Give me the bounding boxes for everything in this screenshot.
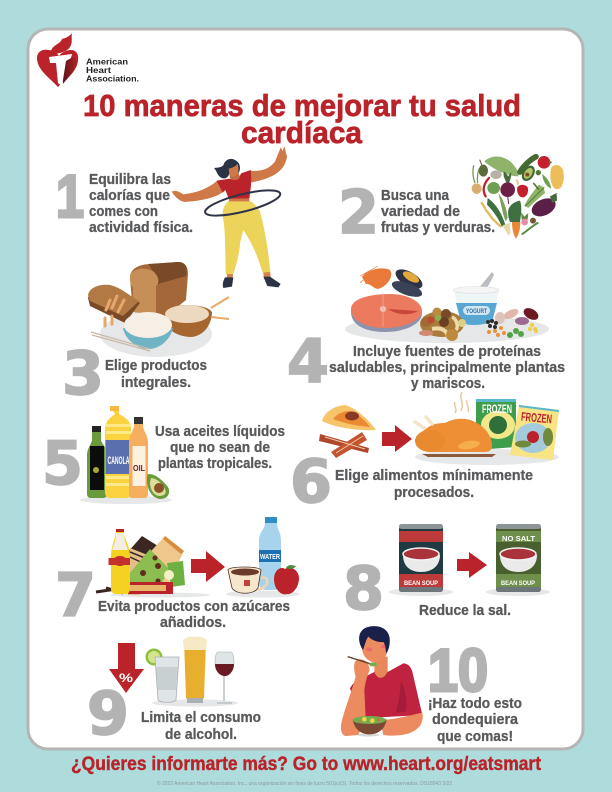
step 10 text: que comas!: [437, 728, 513, 745]
step 5 number: 5: [42, 429, 83, 499]
step 2 text: variedad de: [381, 203, 460, 220]
icon: roast turkey and frozen vegetables: FROZEN: [520, 410, 553, 426]
step 3 text: [105, 357, 207, 391]
step 10 text: [428, 695, 522, 745]
icon: woman with hula hoop: [172, 146, 287, 288]
icon: soup cans: BEAN SOUP: [404, 580, 439, 587]
step 5 text: plantas tropicales.: [158, 455, 272, 472]
step 10 text: ¡Haz todo esto: [428, 695, 522, 712]
step 4 text: y mariscos.: [411, 375, 485, 392]
icon: soup cans: BEAN SOUP: [501, 580, 536, 587]
step 7 number: 7: [55, 561, 96, 631]
step 10 text: dondequiera: [432, 711, 519, 728]
icon: sugary snacks: [96, 529, 210, 598]
step 2 text: [381, 187, 495, 236]
logo: American Heart Association: Heart: [86, 65, 111, 75]
step 1 text: [89, 171, 193, 236]
step 7 text: Evita productos con azúcares: [98, 598, 290, 615]
footer call to action: ¿Quieres informarte más? Go to www.heart.org/eatsmart: [71, 754, 542, 775]
step 1 text: actividad física.: [89, 219, 193, 236]
step 5 text: que no sean de: [170, 439, 270, 456]
icon: oil bottles and avocado: OIL: [133, 463, 145, 473]
step 4 number: 4: [287, 327, 329, 397]
title: [83, 88, 521, 150]
step 6 text: Elige alimentos mínimamente: [335, 467, 533, 484]
icon: whole grains: [88, 262, 229, 357]
icon: down arrow with percent: [109, 643, 144, 693]
step 4 text: Incluye fuentes de proteínas: [353, 343, 541, 360]
arrow: snacks to healthy: [191, 551, 225, 582]
step 9 text: [141, 709, 261, 743]
icon: oil bottles and avocado: [80, 406, 172, 504]
icon: heart of vegetables: [472, 156, 564, 239]
arrow: pizza to turkey: [382, 425, 412, 452]
step 1 text: calorías que: [89, 187, 170, 204]
title: cardíaca: [241, 115, 363, 150]
icon: down arrow with percent: %: [119, 671, 133, 685]
step 6 text: procesados.: [394, 484, 474, 501]
logo: American Heart Association: Association.: [86, 74, 139, 84]
step 4 text: saludables, principalmente plantas: [329, 359, 565, 376]
icon: soup cans: NO SALT: [502, 534, 536, 543]
icon: drinks: [146, 636, 238, 706]
copyright line: © 2022 American Heart Association, Inc., una organización sin fines de lucro 501(c)(3). Todos los derechos reservados. DS18943 3/22: [157, 780, 452, 787]
icon: protein foods: [345, 265, 549, 343]
step 1 text: Equilibra las: [89, 171, 171, 188]
step 7 text: añadidos.: [160, 614, 226, 631]
logo: American Heart Association: American: [86, 56, 128, 66]
step 5 text: Usa aceites líquidos: [155, 423, 285, 440]
icon: tea, water and apple: WATER: [260, 554, 280, 561]
step 1 number: 1: [56, 163, 84, 230]
step 2 text: frutas y verduras.: [381, 219, 495, 236]
step 2 number: 2: [338, 178, 379, 248]
step 3 text: Elige productos: [105, 357, 207, 374]
step 3 text: integrales.: [121, 374, 191, 391]
icon: roast turkey and frozen vegetables: FROZEN: [482, 402, 512, 416]
icon: tea, water and apple: [226, 517, 300, 598]
icon: roast turkey and frozen vegetables: [415, 392, 559, 465]
step 8 text: Reduce la sal.: [419, 602, 511, 619]
step 9 text: Limita el consumo: [141, 709, 261, 726]
icon: soup cans: [389, 524, 550, 596]
logo: American Heart Association: [37, 33, 139, 87]
icon: protein foods: YOGURT: [466, 308, 487, 315]
step 2 text: Busca una: [381, 187, 450, 204]
step 9 text: de alcohol.: [165, 726, 237, 743]
step 10 number: 10: [428, 637, 488, 704]
step 6 text: [335, 467, 533, 501]
step 6 number: 6: [290, 447, 332, 517]
icon: man eating salad: [341, 626, 423, 737]
step 8 number: 8: [343, 554, 384, 624]
arrow: regular soup to no salt: [457, 552, 487, 578]
step 7 text: [98, 598, 290, 631]
step 5 text: [155, 423, 285, 472]
step 1 text: comes con: [89, 203, 158, 220]
title: 10 maneras de mejorar tu salud: [83, 88, 521, 123]
icon: pizza and bacon: [319, 405, 376, 458]
step 4 text: [329, 343, 565, 392]
icon: oil bottles and avocado: CANOLA: [108, 455, 130, 467]
step 9 number: 9: [87, 679, 129, 749]
step 3 number: 3: [62, 339, 104, 409]
